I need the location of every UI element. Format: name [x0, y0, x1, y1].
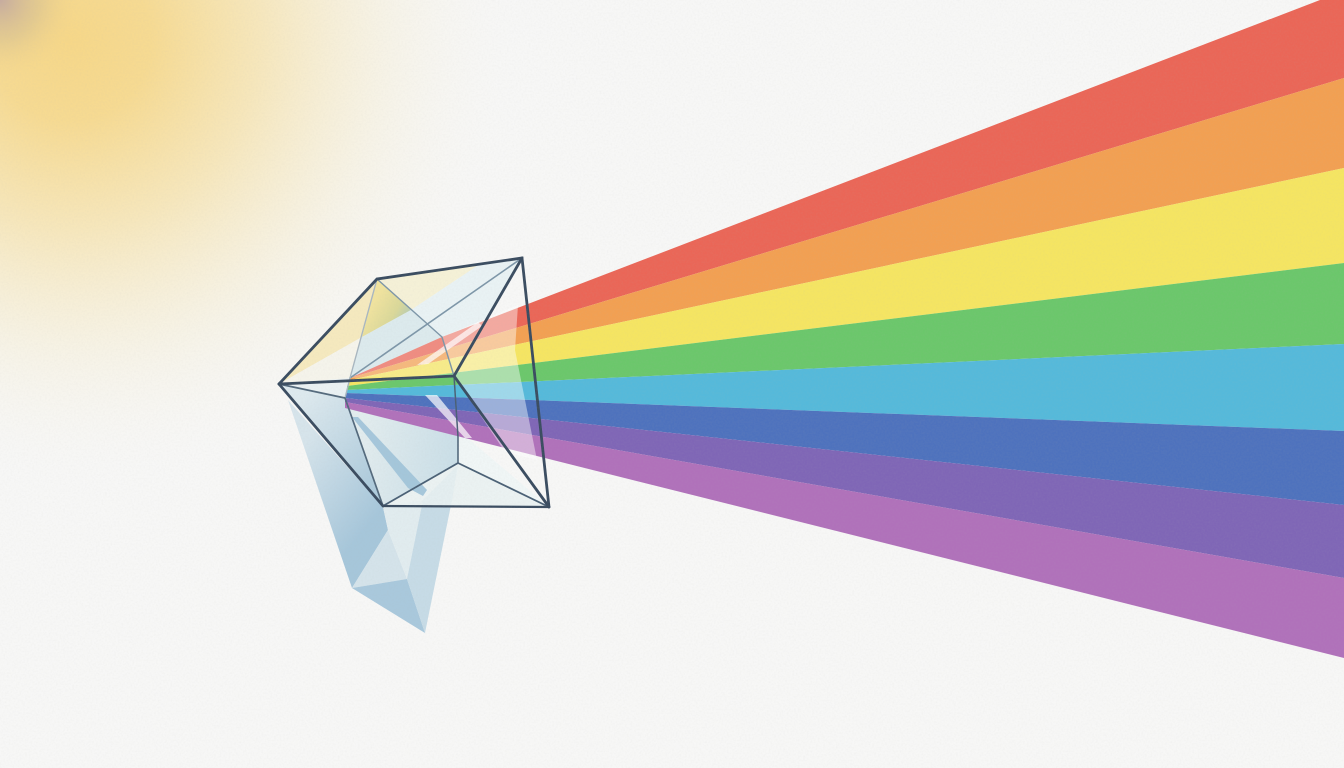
prism bold outer edges — [279, 258, 549, 507]
facet: top right pale blue — [411, 258, 522, 376]
light streak upper — [417, 322, 482, 365]
light streak lower — [425, 395, 472, 438]
rainbow spectrum beams — [345, 0, 1344, 658]
facet: upper-left yellow tint — [279, 279, 377, 384]
facet: left pale — [279, 337, 362, 384]
facet: olive gradient — [362, 279, 411, 337]
beam: orange — [350, 78, 1344, 380]
facet: upper lower-left pale — [279, 378, 350, 398]
beam: blue — [345, 393, 1344, 505]
facet: inner lower hull — [345, 400, 458, 506]
wash: upper inner beams — [350, 337, 454, 378]
facet: bottom pale — [383, 463, 549, 507]
facet: lower right pale — [458, 430, 549, 507]
prism thin inner edges — [279, 258, 549, 507]
beam: violet — [345, 398, 1344, 578]
beam: red — [350, 0, 1344, 378]
facet: inner light blue — [350, 310, 442, 378]
facet: top pale yellow — [377, 264, 480, 310]
inner blue shadow stripe — [352, 417, 427, 496]
beam: yellow — [347, 168, 1344, 386]
prism cast shadow — [288, 400, 458, 633]
beam: purple — [345, 402, 1344, 658]
prism glass facets behind beams — [279, 258, 549, 507]
warm light glow in top-left corner — [0, 0, 540, 500]
glass washes and light streaks over beams — [350, 305, 537, 460]
beam: green — [347, 263, 1344, 390]
beam: cyan — [346, 344, 1344, 431]
facet: lower-left shadowed — [279, 384, 383, 506]
wash: right of centre over beams — [442, 305, 537, 460]
